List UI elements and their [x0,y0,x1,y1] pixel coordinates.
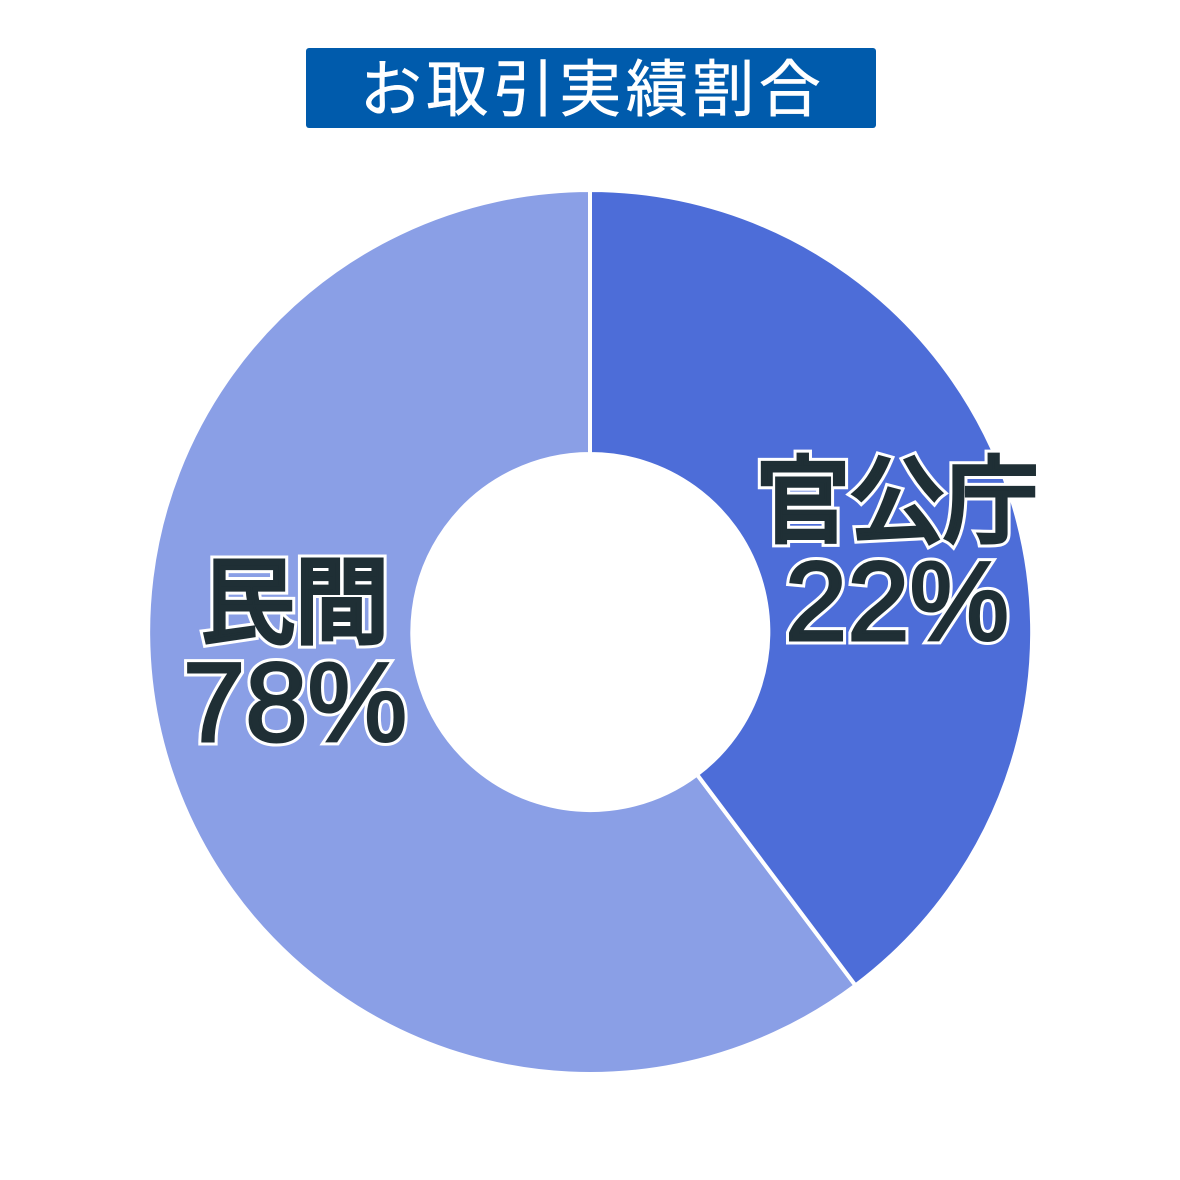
title: お取引実績割合 [360,56,825,125]
label: private sector [183,550,407,765]
segment: private sector [148,190,856,1074]
segment: government [590,190,1032,985]
label: government [756,449,1038,664]
label: private sector: 78% [183,640,407,765]
label: government: 22% [785,539,1009,664]
label: government: 官公庁 [756,449,1038,554]
label: private sector: 78% [183,640,407,765]
label: private sector: 民間 [201,550,389,655]
label: government: 官公庁 [756,449,1038,554]
label: private sector: 民間 [201,550,389,655]
label: government: 22% [785,539,1009,664]
